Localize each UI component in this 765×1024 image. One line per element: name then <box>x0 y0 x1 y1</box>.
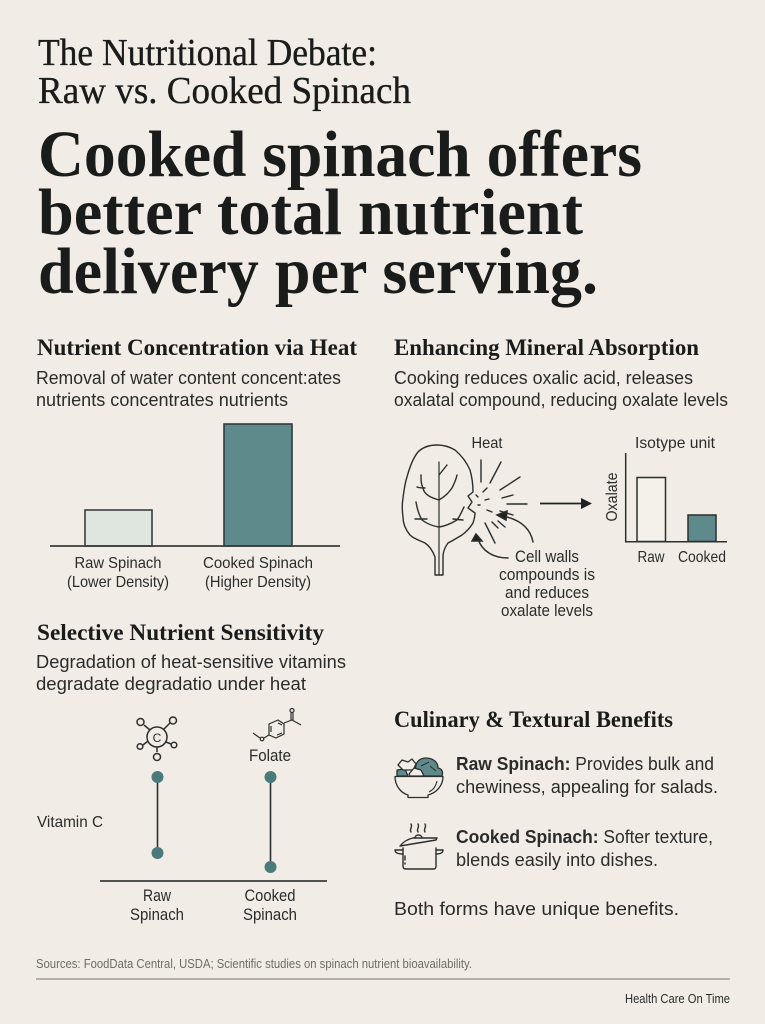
headline <box>38 118 642 308</box>
text: conclusion: Both forms have unique benefits. <box>394 898 679 919</box>
headline: better total nutrient <box>38 176 583 249</box>
panel: culinary and textural benefits <box>394 707 718 919</box>
chart: folate range <box>264 771 276 873</box>
callout: cell walls <box>499 548 595 620</box>
heading: nutrient concentration: Nutrient Concentration via Heat <box>37 335 357 360</box>
arrow: heat to oxalate chart <box>540 498 592 509</box>
heading: mineral absorption: Enhancing Mineral Absorption <box>394 335 699 360</box>
text: mineral absorption description: oxalatal compound, reducing oxalate levels <box>394 389 728 410</box>
heading: nutrient sensitivity: Selective Nutrient Sensitivity <box>37 620 324 645</box>
text: cooked spinach benefit <box>456 827 713 870</box>
bar chart: oxalate <box>604 435 727 566</box>
panel: nutrient concentration <box>36 335 357 591</box>
text: nutrient sensitivity description <box>36 651 346 694</box>
callout: cell walls: Cell walls <box>515 548 579 566</box>
text: raw spinach benefit: chewiness, appealing for salads. <box>456 777 718 797</box>
text: nutrient concentration description <box>36 367 341 410</box>
headline: delivery per serving. <box>38 235 598 308</box>
axis labels: Spinach <box>130 906 184 924</box>
text: nutrient concentration description: nutrients concentrates nutrients <box>36 389 288 410</box>
axis labels: Raw <box>143 887 171 905</box>
axis labels: Cooked <box>244 887 296 905</box>
label: heat: Heat <box>472 435 503 452</box>
axis labels <box>130 887 297 924</box>
title <box>38 32 411 112</box>
icon: vitamin C molecule <box>137 717 177 760</box>
panel: mineral absorption <box>394 335 728 620</box>
callout: cell walls: oxalate levels <box>501 602 593 620</box>
text: raw spinach benefit: Raw Spinach: Provides bulk and <box>456 754 714 774</box>
text: cooked spinach benefit: Cooked Spinach: Softer texture, <box>456 827 713 847</box>
label: vitamin C: Vitamin C <box>37 814 103 831</box>
text: nutrient sensitivity description: Degradation of heat-sensitive vitamins <box>36 651 346 672</box>
bar chart: oxalate: Raw <box>638 549 665 566</box>
icon: salad bowl <box>395 758 443 798</box>
credit: Health Care On Time <box>625 991 730 1006</box>
bar chart: nutrient density: Cooked Spinach <box>203 555 313 572</box>
axis labels: Spinach <box>243 906 297 924</box>
panel: selective nutrient sensitivity <box>36 620 346 924</box>
sources: Sources: FoodData Central, USDA; Scientific studies on spinach nutrient bioavailability. <box>36 957 472 971</box>
bar chart: oxalate: Oxalate <box>604 472 621 522</box>
bar chart: nutrient density: Raw Spinach <box>74 555 162 572</box>
title: The Nutritional Debate: <box>38 32 377 74</box>
text: nutrient sensitivity description: degradate degradatio under heat <box>36 673 306 694</box>
text: raw spinach benefit <box>456 754 718 797</box>
icon: spinach leaf with heat burst <box>402 445 527 575</box>
text: cooked spinach benefit: blends easily into dishes. <box>456 850 658 870</box>
chart: vitamin C range <box>152 771 164 859</box>
callout arrows <box>472 511 533 558</box>
bar chart: oxalate: Isotype unit <box>635 435 716 452</box>
label: folate: Folate <box>249 747 291 765</box>
text: nutrient concentration description: Removal of water content concent:ates <box>36 367 341 388</box>
bar chart: oxalate: Cooked <box>678 549 726 566</box>
callout: cell walls: compounds is <box>499 566 595 584</box>
callout: cell walls: and reduces <box>505 584 589 602</box>
bar chart: nutrient density: (Higher Density) <box>205 574 311 591</box>
icon: vitamin C molecule: C <box>153 731 162 745</box>
text: mineral absorption description <box>394 367 728 410</box>
text: mineral absorption description: Cooking reduces oxalic acid, releases <box>394 367 693 388</box>
icon: cooking pot <box>395 824 443 869</box>
bar chart: nutrient density <box>50 424 340 591</box>
bar chart: nutrient density: (Lower Density) <box>67 574 169 591</box>
headline: Cooked spinach offers <box>38 118 642 191</box>
title: Raw vs. Cooked Spinach <box>38 70 411 112</box>
icon: folate molecule <box>253 708 301 741</box>
heading: culinary benefits: Culinary & Textural Benefits <box>394 707 673 732</box>
